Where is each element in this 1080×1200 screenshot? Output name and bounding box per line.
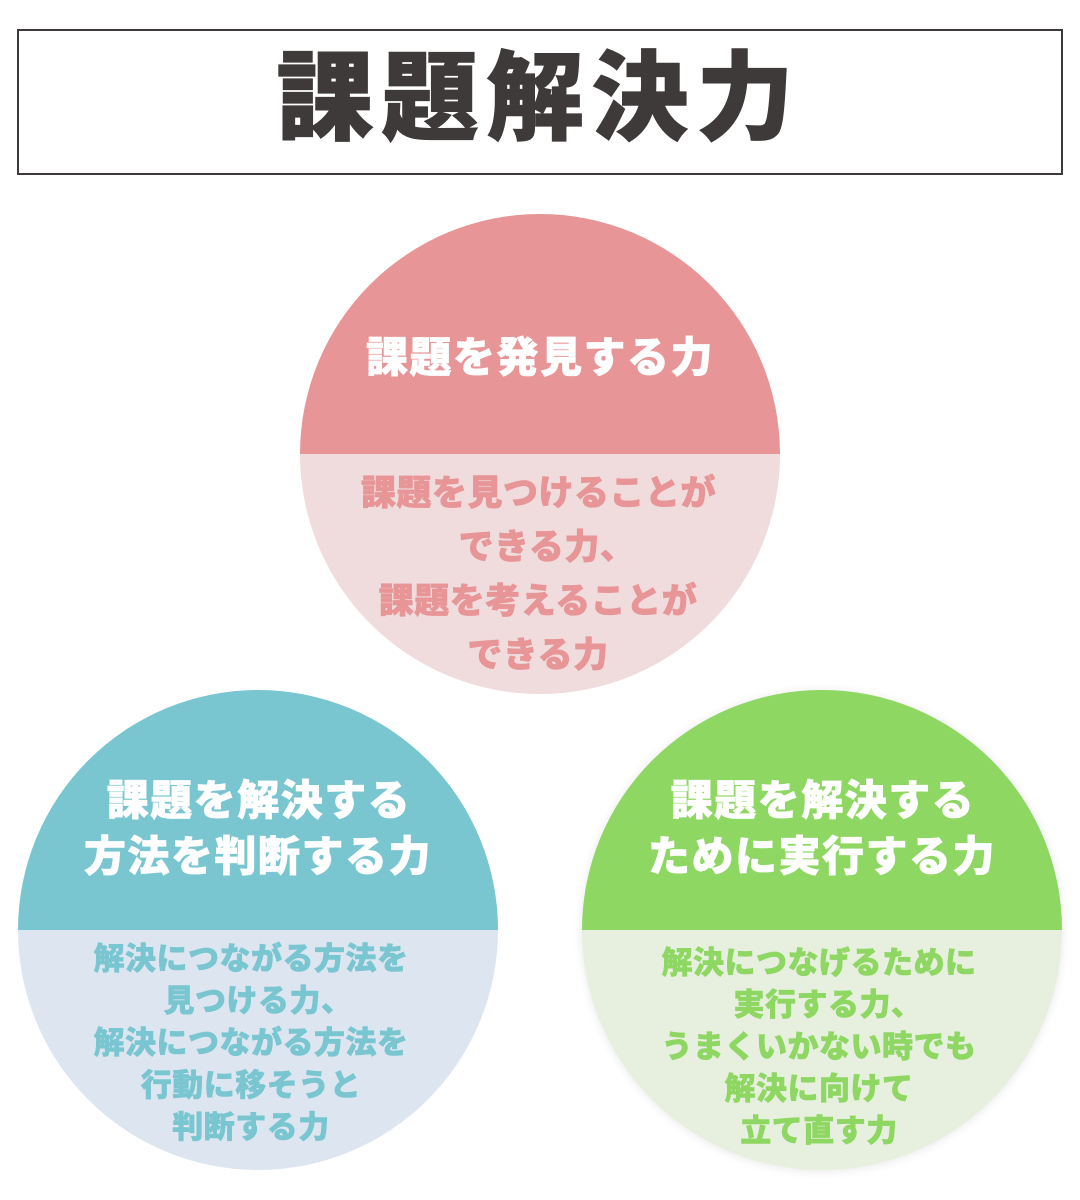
description: deciding solution method: 判断する力: [172, 1110, 330, 1145]
description: executing to solve: 立て直す力: [740, 1114, 898, 1148]
panel: deciding solution method circle: [18, 690, 498, 1170]
description: deciding solution method: [94, 942, 408, 1145]
panel: executing to solve circle: [582, 690, 1062, 1171]
heading: deciding solution method: 方法を判断する力: [84, 833, 432, 880]
description: deciding solution method: 行動に移そうと: [141, 1068, 361, 1103]
heading: executing to solve: ために実行する力: [648, 833, 996, 880]
heading: finding problems: 課題を発見する力: [366, 334, 714, 381]
description: finding problems: [361, 473, 716, 675]
description: executing to solve: 解決につなげるために: [662, 946, 976, 980]
description: finding problems: 課題を考えることが: [379, 581, 697, 621]
heading: executing to solve: 課題を解決する: [671, 777, 975, 824]
panel: finding problems circle: [300, 214, 780, 694]
description: executing to solve: 解決に向けて: [724, 1072, 914, 1106]
description: finding problems: できる力: [467, 636, 609, 675]
heading: deciding solution method: 課題を解決する: [107, 777, 411, 824]
description: deciding solution method: 見つける力、: [164, 984, 352, 1018]
title: 課題解決力: [276, 44, 802, 153]
description: deciding solution method: 解決につながる方法を: [94, 1026, 408, 1060]
description: executing to solve: [662, 946, 976, 1148]
description: executing to solve: 実行する力、: [734, 988, 922, 1022]
description: finding problems: できる力、: [459, 528, 635, 567]
description: finding problems: 課題を見つけることが: [361, 473, 716, 513]
title box: [18, 30, 1062, 174]
description: executing to solve: うまくいかない時でも: [662, 1030, 976, 1064]
description: deciding solution method: 解決につながる方法を: [94, 942, 408, 976]
